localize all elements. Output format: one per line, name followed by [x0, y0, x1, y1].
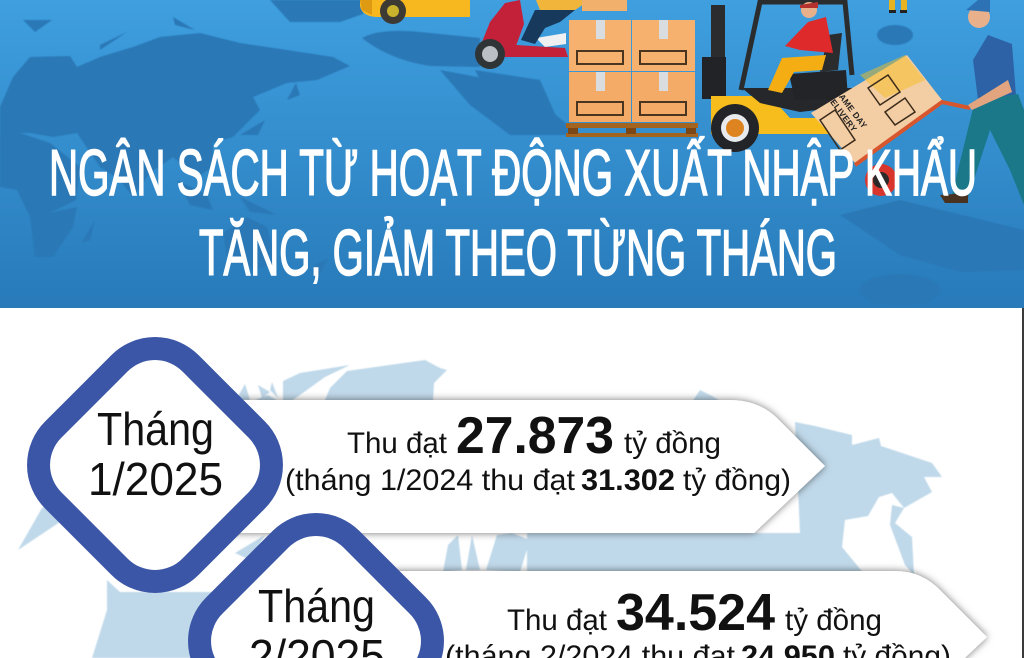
January revenue line: 27.873: [456, 407, 614, 465]
January revenue line: Thu đạt: [347, 427, 448, 460]
February revenue line: 34.524: [616, 584, 775, 642]
world map silhouette: [0, 0, 1024, 306]
panel: February 2025: [179, 504, 987, 658]
icon: yellow car: [360, 0, 470, 24]
February revenue line: tỷ đồng: [785, 604, 882, 637]
icon: stacked cartons on pallet: [566, 20, 698, 137]
title: [49, 136, 977, 289]
banner background: [0, 0, 1024, 308]
badge: Tháng 2/2025: Tháng: [258, 580, 375, 632]
arrow banner: January figures: [230, 400, 825, 533]
panel: header banner: [0, 0, 1024, 308]
icon: delivery worker: [940, 0, 1024, 205]
panel: January 2025: [18, 328, 825, 602]
right edge line: [1022, 308, 1024, 658]
January comparison line: 31.302: [581, 464, 675, 497]
badge: Tháng 1/2025: [18, 328, 292, 602]
January revenue line: tỷ đồng: [624, 427, 721, 460]
badge: Tháng 1/2025: Tháng: [97, 403, 214, 455]
icon: forklift with driver: [702, 2, 870, 152]
January comparison line: tỷ đồng): [683, 464, 791, 497]
January revenue line: [347, 407, 721, 465]
badge: Tháng 1/2025: 1/2025: [88, 453, 223, 505]
arrow banner: February figures: [392, 571, 987, 658]
icon: hand truck with parcel: [811, 55, 970, 196]
parcel label: SAME DAY: [833, 87, 869, 130]
February revenue line: Thu đạt: [507, 604, 608, 637]
badge: Tháng 2/2025: [179, 504, 453, 658]
February comparison line: [445, 640, 951, 658]
January comparison line: (tháng 1/2024 thu đạt: [285, 464, 576, 497]
light world map background: [18, 360, 942, 658]
icon: hand truck with parcel: DELIVERY: [824, 92, 859, 134]
February revenue line: [507, 584, 882, 642]
icon: worker feet at top: [889, 0, 907, 13]
icon: scooter with rider: [475, 0, 627, 69]
January comparison line: [285, 464, 791, 497]
